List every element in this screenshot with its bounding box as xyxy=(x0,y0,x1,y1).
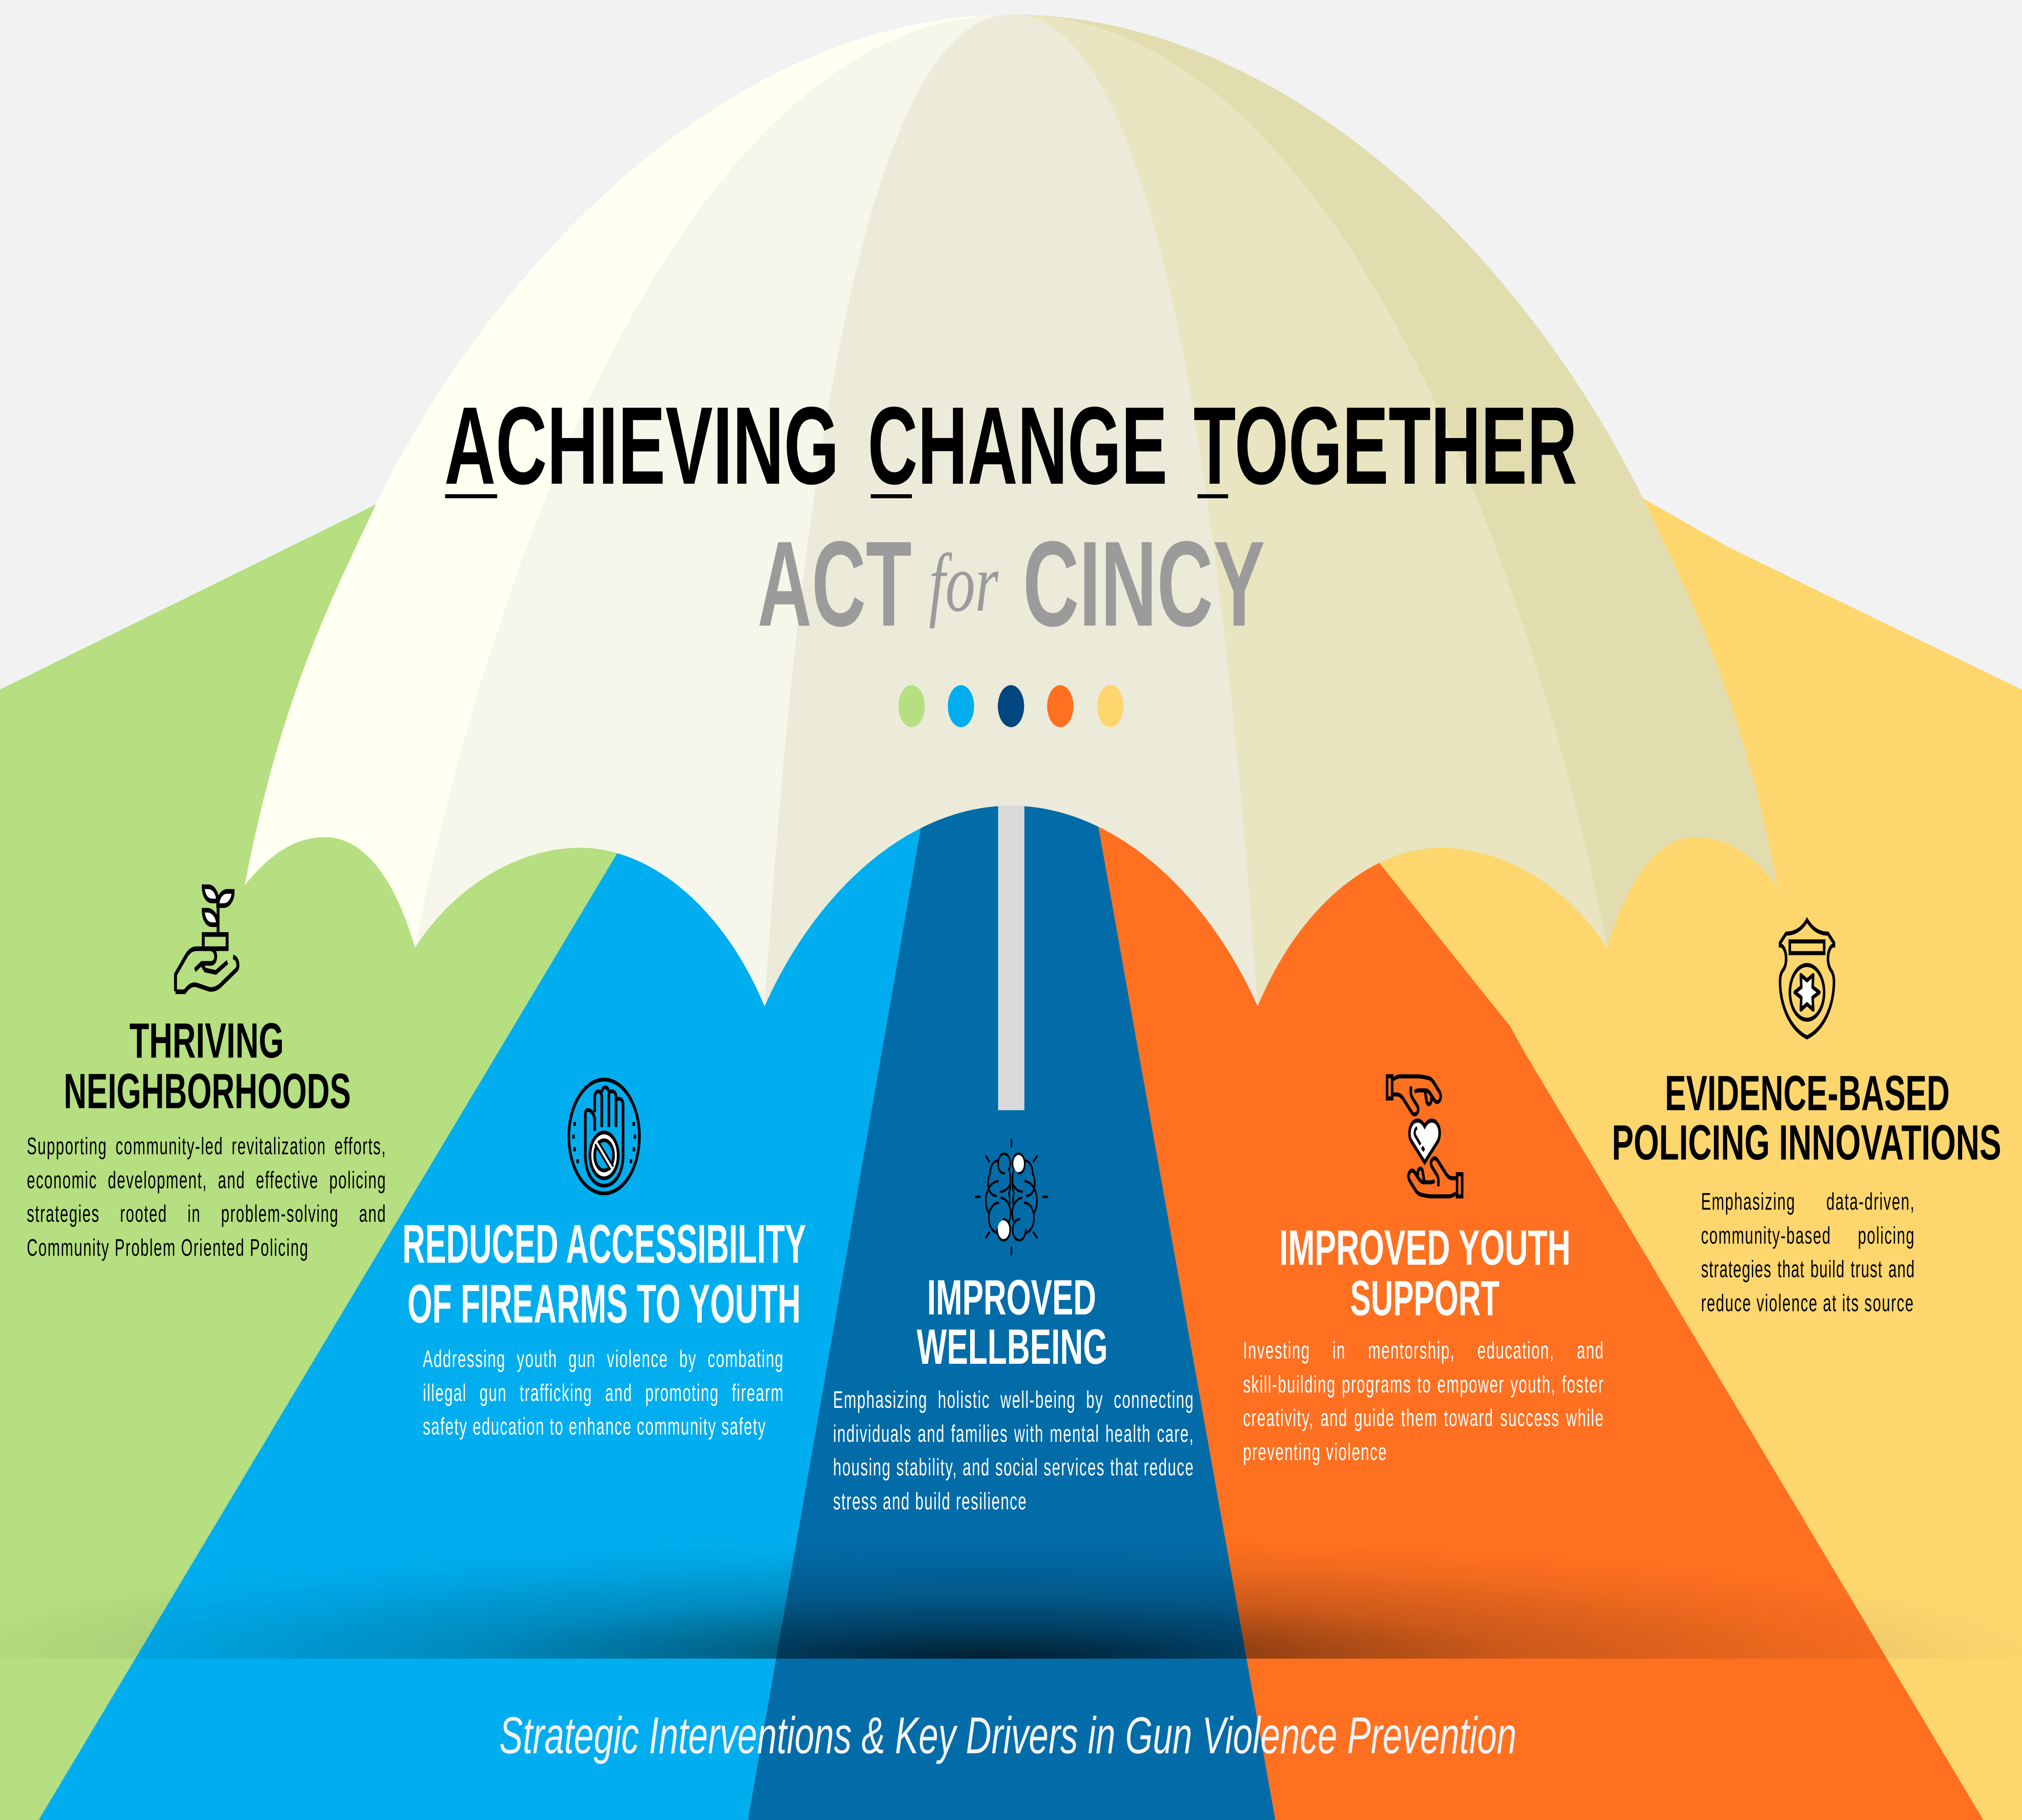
body text: Emphasizing data-driven, xyxy=(1701,1188,1915,1215)
heading xyxy=(64,1012,351,1119)
body text: individuals and families with mental health care, xyxy=(833,1420,1194,1447)
panel: reduced accessibility of firearms to youth xyxy=(402,1079,806,1445)
heading xyxy=(1279,1219,1571,1326)
heading: POLICING INNOVATIONS xyxy=(1612,1114,2001,1170)
umbrella canopy xyxy=(227,0,1795,1052)
body text xyxy=(1243,1334,1604,1471)
body text: economic development, and effective policing xyxy=(27,1166,387,1193)
icon: police badge xyxy=(1780,920,1834,1037)
body text: strategies that build trust and xyxy=(1701,1256,1915,1282)
panel: improved youth support xyxy=(1243,1076,1604,1471)
heading: IMPROVED YOUTH xyxy=(1279,1219,1571,1275)
subtitle: CINCY xyxy=(1023,516,1265,652)
icon: hand holding plant xyxy=(176,887,238,992)
icon: brain xyxy=(975,1140,1047,1255)
body text: creativity, and guide them toward success while xyxy=(1243,1405,1604,1431)
title: CHANGE xyxy=(868,384,1168,508)
heading: REDUCED ACCESSIBILITY xyxy=(402,1213,806,1274)
body text: Community Problem Oriented Policing xyxy=(27,1234,309,1261)
title: ACHIEVING xyxy=(444,384,839,508)
subtitle xyxy=(757,516,1265,652)
icon: stop hand xyxy=(569,1079,639,1194)
heading xyxy=(1612,1065,2001,1170)
body text: Emphasizing holistic well-being by connecting xyxy=(833,1386,1194,1413)
heading: WELLBEING xyxy=(917,1318,1108,1374)
green section background xyxy=(0,504,758,1820)
orange section background xyxy=(1091,789,1983,1820)
body text: preventing violence xyxy=(1243,1438,1387,1465)
dark blue section background xyxy=(748,789,1275,1820)
body text: Investing in mentorship, education, and xyxy=(1243,1337,1604,1364)
panel: evidence-based policing innovations xyxy=(1612,920,2001,1323)
ground shadow xyxy=(0,1537,2022,1659)
heading: NEIGHBORHOODS xyxy=(64,1063,351,1119)
title: TOGETHER xyxy=(1193,384,1577,508)
body text: stress and build resilience xyxy=(833,1488,1027,1514)
body text: reduce violence at its source. xyxy=(1701,1289,1915,1316)
colored dots xyxy=(899,685,1123,727)
heading: SUPPORT xyxy=(1350,1270,1500,1326)
icon: hands with heart xyxy=(1387,1076,1462,1196)
heading: EVIDENCE-BASED xyxy=(1665,1065,1950,1121)
heading: THRIVING xyxy=(129,1012,284,1068)
body text: community-based policing xyxy=(1701,1222,1915,1249)
body text: strategies rooted in problem-solving and xyxy=(27,1200,387,1227)
heading xyxy=(917,1269,1108,1374)
body text: housing stability, and social services that reduce xyxy=(833,1454,1194,1481)
yellow section background xyxy=(1264,498,2022,1820)
subtitle: for xyxy=(929,537,999,629)
body text xyxy=(833,1383,1194,1521)
blue section background xyxy=(39,789,928,1820)
body text xyxy=(27,1130,387,1267)
heading: IMPROVED xyxy=(927,1269,1096,1325)
body text: Addressing youth gun violence by combating xyxy=(423,1346,784,1372)
body text: Supporting community-led revitalization efforts, xyxy=(27,1133,387,1160)
heading: OF FIREARMS TO YOUTH xyxy=(408,1273,801,1334)
umbrella handle xyxy=(998,806,1024,1110)
subtitle: ACT xyxy=(757,516,912,652)
body text: safety education to enhance community safety xyxy=(423,1413,766,1440)
footer caption: Strategic Interventions & Key Drivers in Gun Violence Prevention xyxy=(499,1706,1516,1765)
heading xyxy=(402,1213,806,1334)
body text xyxy=(1701,1185,1915,1323)
panel: thriving neighborhoods xyxy=(27,887,387,1267)
body text xyxy=(423,1342,784,1445)
body text: skill-building programs to empower youth, foster xyxy=(1243,1371,1604,1398)
panel: improved wellbeing xyxy=(833,1140,1194,1521)
body text: illegal gun trafficking and promoting firearm xyxy=(423,1379,784,1406)
title xyxy=(444,384,1577,508)
